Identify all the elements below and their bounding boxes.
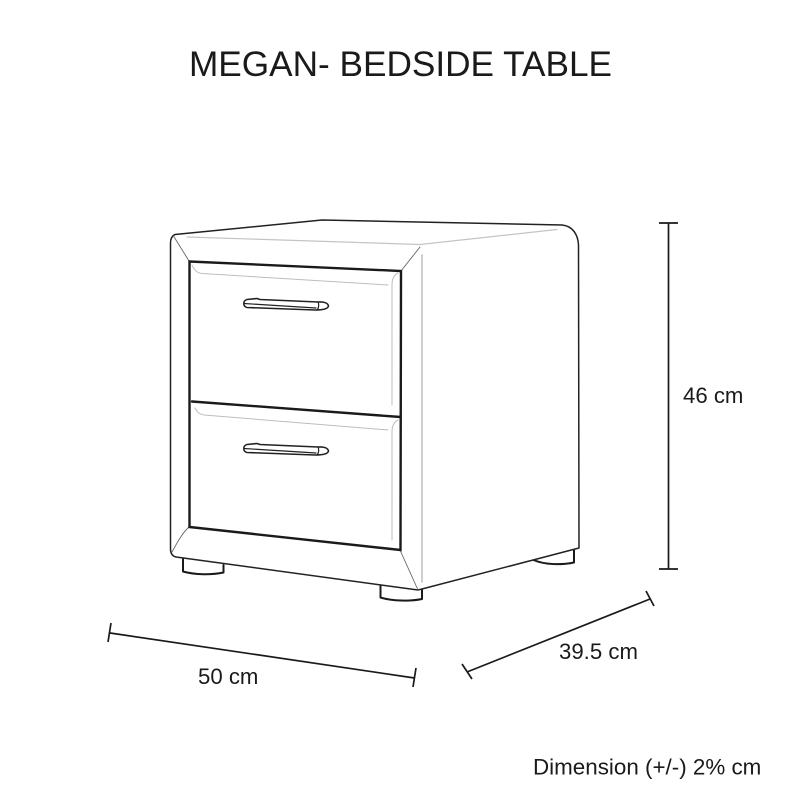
upper drawer grey inset xyxy=(192,265,398,405)
bedside table drawing xyxy=(170,220,579,601)
cabinet outline xyxy=(170,220,579,590)
drawer divider xyxy=(192,402,400,417)
tolerance note: Dimension (+/-) 2% cm xyxy=(533,754,761,780)
depth dimension xyxy=(462,591,654,679)
height dimension xyxy=(659,223,678,569)
lower drawer grey inset xyxy=(195,408,398,540)
upper handle xyxy=(244,298,328,310)
front foot xyxy=(380,585,422,601)
frame bevel lines xyxy=(172,236,420,590)
width dimension xyxy=(108,623,416,687)
back right foot xyxy=(534,548,574,564)
drawer front frame xyxy=(190,262,401,550)
title: MEGAN- BEDSIDE TABLE xyxy=(189,45,612,84)
height label: 46 cm xyxy=(683,383,743,408)
lower handle xyxy=(244,444,328,455)
top and side grey detail lines xyxy=(187,230,557,244)
back left foot xyxy=(183,559,224,574)
width label: 50 cm xyxy=(198,664,258,689)
depth label: 39.5 cm xyxy=(559,639,638,664)
